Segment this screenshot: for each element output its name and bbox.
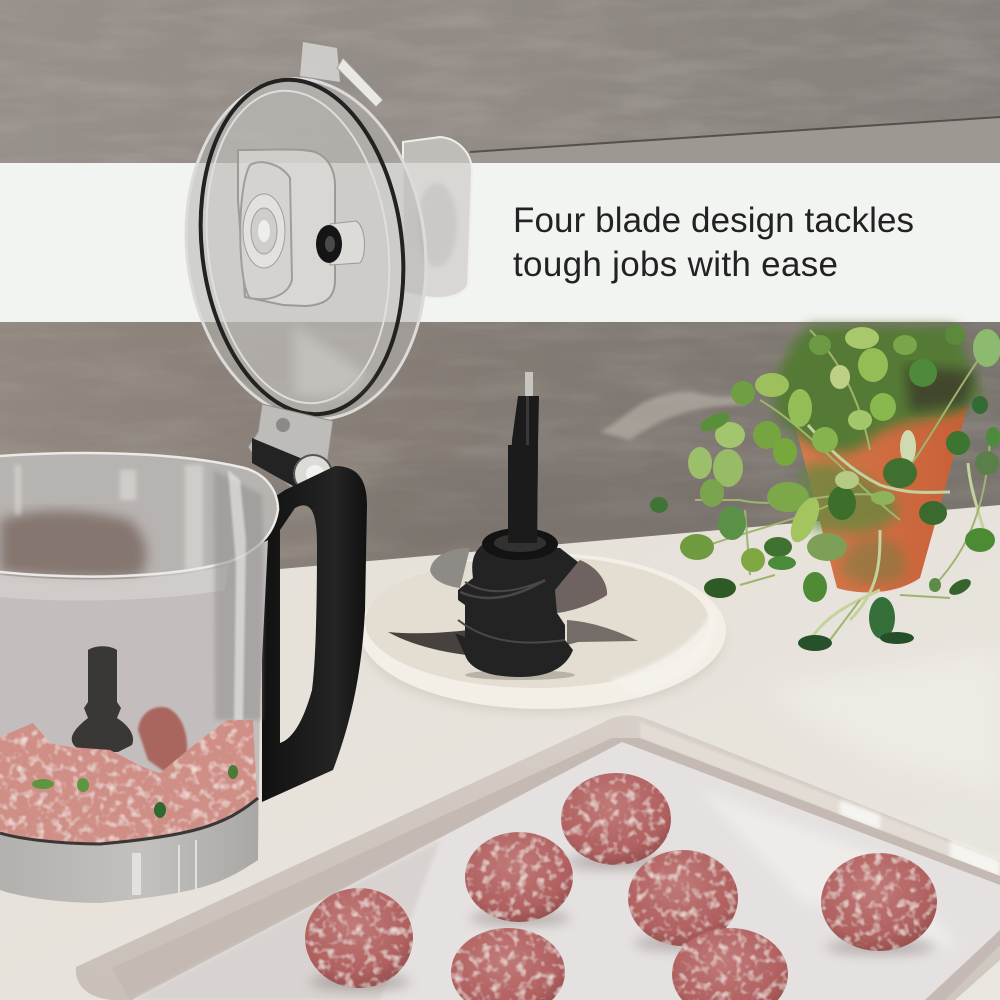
meatballs (305, 773, 937, 1000)
meat residue seen through bowl (0, 511, 147, 578)
lid pin (316, 221, 365, 265)
food processor lid (167, 42, 472, 495)
meatball 7 (672, 928, 788, 1000)
foliage over pot (800, 464, 900, 533)
lid latch tab (300, 42, 383, 107)
caption band (0, 163, 1000, 322)
bowl base collar (0, 799, 258, 903)
lower blades (388, 630, 520, 657)
lid disc (167, 65, 445, 433)
base mould marks (132, 840, 197, 895)
upper stone wall (0, 0, 1000, 165)
meatball 5 (821, 853, 937, 951)
caption text: tough jobs with ease (513, 245, 838, 284)
bowl lower body (0, 540, 268, 896)
feed tube outline (238, 150, 335, 306)
lid seal ring (182, 68, 422, 426)
caption text (513, 201, 914, 284)
leaves (650, 325, 1000, 651)
lid light reflection (293, 325, 368, 397)
caption text: Four blade design tackles (513, 201, 914, 240)
four blade assembly (388, 372, 638, 680)
center pin (525, 372, 533, 398)
bowl front rim band (0, 565, 228, 601)
herbs in meat (32, 765, 238, 818)
bowl handle (262, 466, 367, 802)
bowl side dark column (214, 470, 264, 720)
bowl reflections (15, 465, 203, 570)
terracotta pot (795, 405, 968, 592)
meatball 3 (561, 773, 671, 865)
meatball 4 (628, 850, 738, 946)
counter top (0, 505, 1000, 1000)
counter window light (760, 650, 1000, 790)
stems (808, 425, 985, 640)
bowl rim stroke (0, 453, 278, 577)
upper blades (430, 548, 470, 588)
lid feed chute (403, 137, 472, 298)
hinge (248, 404, 333, 495)
meatball 6 (451, 928, 565, 1000)
meatball 2 (465, 832, 573, 922)
potted plant (650, 325, 1000, 651)
meat lump on bowl wall (138, 707, 187, 772)
plate (360, 553, 726, 712)
feed tube insert with concentric rings (240, 162, 292, 299)
tray floor (112, 738, 1000, 1000)
food processor bowl (0, 453, 278, 903)
bowl upper back interior (0, 453, 278, 577)
hub body (455, 545, 578, 677)
blade shaft (72, 646, 133, 752)
lower stone wall (0, 320, 1000, 590)
ground meat (0, 720, 257, 843)
soil and foliage mass (774, 326, 982, 453)
shaft (508, 396, 539, 543)
baking tray (76, 715, 1000, 1000)
meatball 1 (305, 888, 413, 988)
parchment paper (132, 742, 1000, 1000)
tray rim highlights (640, 722, 1000, 876)
